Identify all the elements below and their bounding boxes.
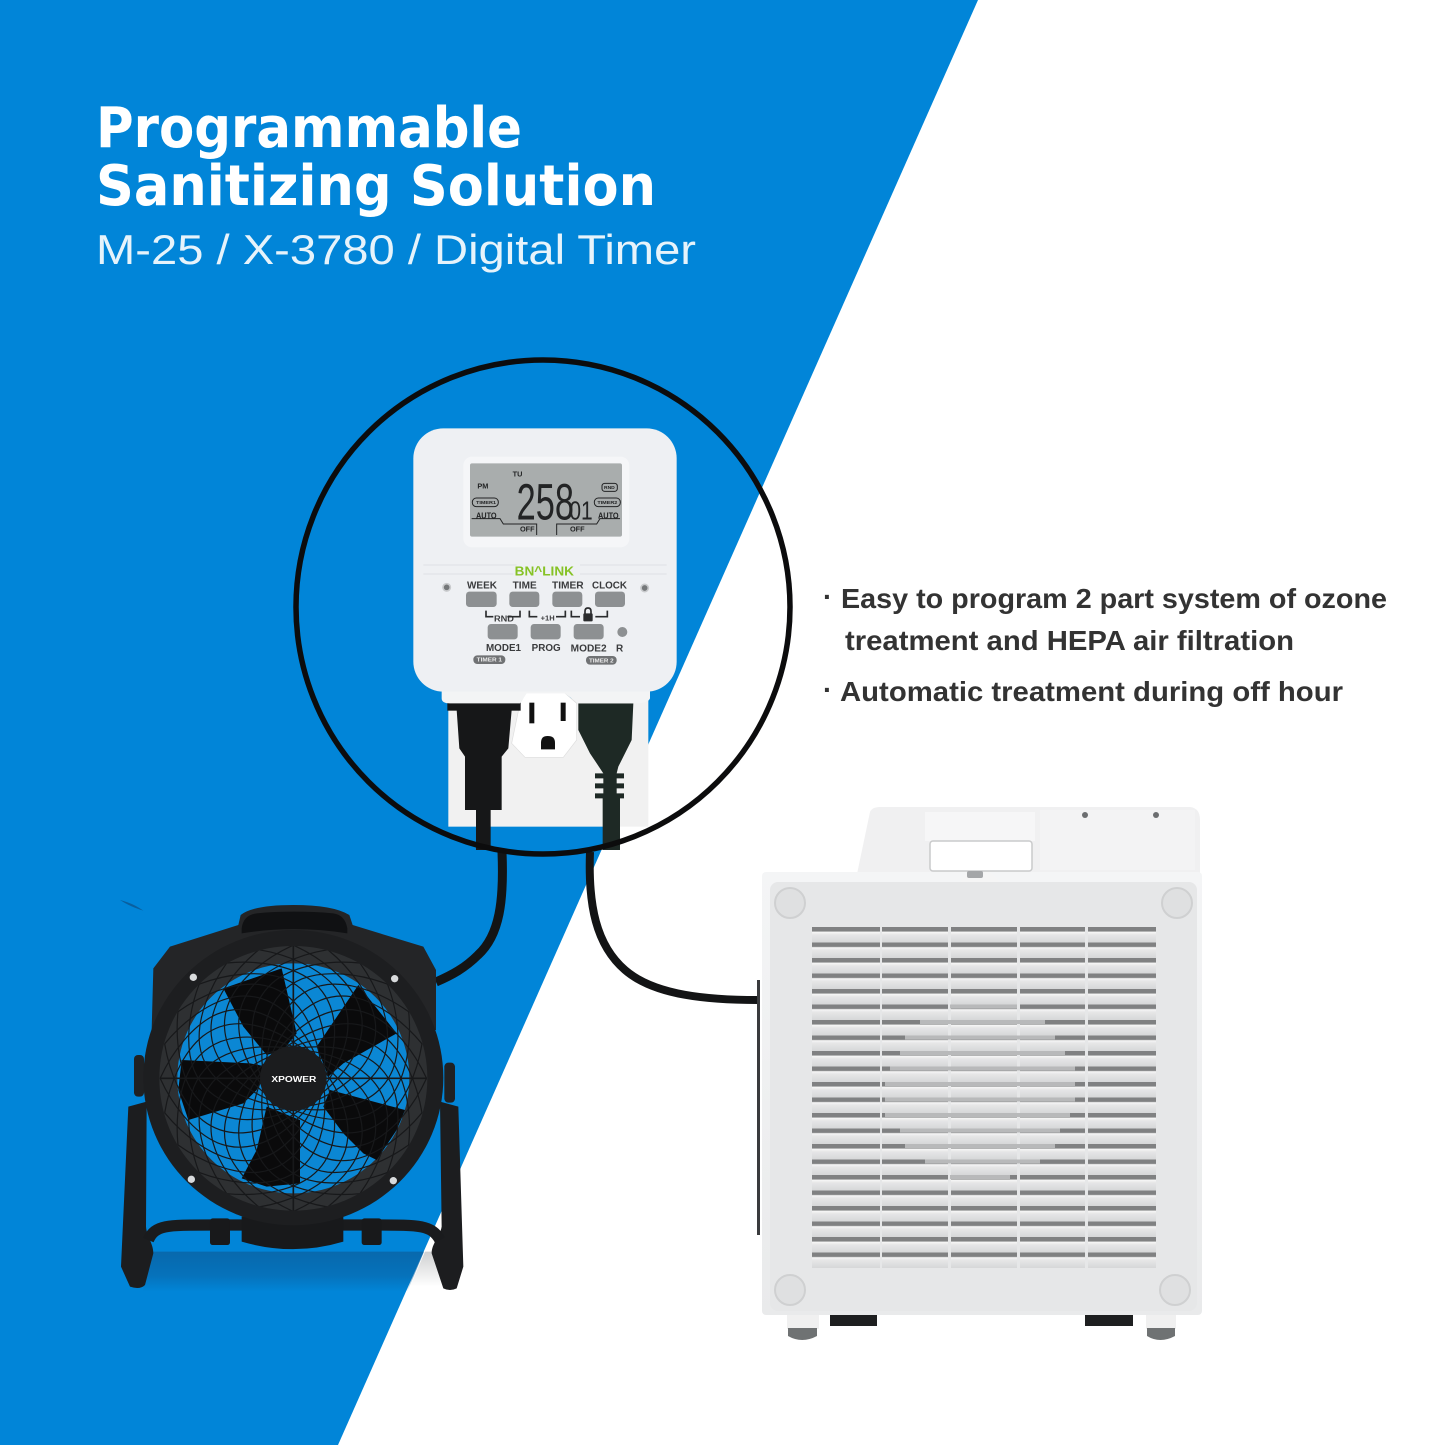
magnifier circle (296, 360, 790, 854)
scrubber body (762, 872, 1202, 1315)
lcd screen: TIMER1 (476, 500, 496, 506)
scrubber louver grille (812, 927, 1156, 1268)
timer screws (443, 584, 648, 592)
housing groove (423, 565, 667, 574)
lcd bezel (463, 457, 629, 547)
lcd screen: TU (513, 470, 522, 479)
timer button labels: PROG (532, 643, 561, 654)
fan hub with logo (260, 1046, 327, 1111)
bullet list: treatment and HEPA air filtration (845, 625, 1294, 656)
black plug (447, 703, 521, 850)
bullet list: · (823, 674, 832, 705)
scrubber side strip (757, 980, 760, 1235)
subtitle: M-25 / X-3780 / Digital Timer (96, 226, 696, 273)
timer button labels: R (616, 644, 623, 655)
timer button labels (467, 580, 628, 655)
scrubber handle (857, 807, 1200, 874)
background streak (120, 900, 143, 911)
lcd screen: RND (604, 485, 615, 491)
scrubber corner bosses (775, 888, 1192, 1305)
timer button labels: +1H (541, 614, 555, 623)
scrubber handle bolt (960, 871, 1000, 882)
wall outlet (512, 692, 577, 757)
scrubber front panel (770, 882, 1197, 1311)
timer button labels: CLOCK (592, 580, 628, 591)
timer badges (473, 655, 617, 665)
title (96, 96, 656, 219)
fan wire guard (159, 944, 427, 1212)
cord: timer to fan (436, 852, 502, 982)
lcd screen: PM (477, 482, 488, 491)
timer button labels: RND (494, 614, 514, 623)
button group brackets (486, 611, 607, 617)
bullet list: Easy to program 2 part system of ozone (841, 583, 1387, 614)
bullet list (823, 581, 1387, 707)
timer button labels: TIME (513, 580, 537, 591)
fan base tube (148, 1225, 440, 1240)
timer buttons (466, 592, 627, 639)
wall plate (448, 698, 648, 827)
timer button labels: MODE2 (571, 644, 607, 655)
fan side knobs (134, 1055, 455, 1103)
fan guard ring (143, 930, 443, 1225)
fan guard screws (188, 974, 398, 1184)
fan blades (178, 968, 405, 1187)
lcd screen: 258 (517, 473, 574, 530)
timer badges: TIMER 1 (477, 658, 502, 664)
fan stand legs (121, 1102, 463, 1290)
timer lower lip (442, 690, 650, 703)
lock icon (583, 608, 593, 621)
dark green plug (578, 703, 633, 850)
lcd screen: OFF (520, 525, 535, 534)
lcd screen: OFF (570, 525, 585, 534)
bullet list: Automatic treatment during off hour (840, 676, 1343, 707)
title: Programmable (96, 96, 522, 161)
air scrubber unit (757, 807, 1202, 1340)
scrubber top mounting screws (1082, 812, 1159, 818)
title: Sanitizing Solution (96, 154, 656, 219)
scrubber handle opening (930, 841, 1032, 871)
fan base clamps (210, 1217, 382, 1249)
timer button labels: WEEK (467, 580, 498, 591)
fan hub with logo: XPOWER (271, 1075, 317, 1084)
timer button labels: TIMER (552, 580, 584, 591)
fan blue opening (177, 963, 409, 1193)
lcd screen: 01 (569, 495, 593, 525)
scrubber feet (787, 1312, 1176, 1340)
fan housing and handle (152, 905, 436, 1030)
timer housing (413, 428, 677, 692)
digital timer and outlet (413, 428, 677, 850)
scrubber internal label ghost (885, 1004, 1075, 1179)
bullet list: · (823, 581, 832, 612)
lcd screen: TIMER2 (597, 500, 618, 506)
timer badges: TIMER 2 (589, 658, 614, 664)
timer button labels: MODE1 (486, 643, 521, 654)
cord: timer to air scrubber (590, 852, 758, 1000)
air mover fan (120, 900, 463, 1292)
brand logo: BN^LINK (515, 563, 574, 578)
lcd screen: AUTO (598, 510, 619, 520)
lcd screen: AUTO (476, 510, 497, 520)
fan floor shadow (143, 1252, 447, 1292)
blue diagonal background (0, 0, 978, 1445)
lcd screen (470, 463, 622, 537)
